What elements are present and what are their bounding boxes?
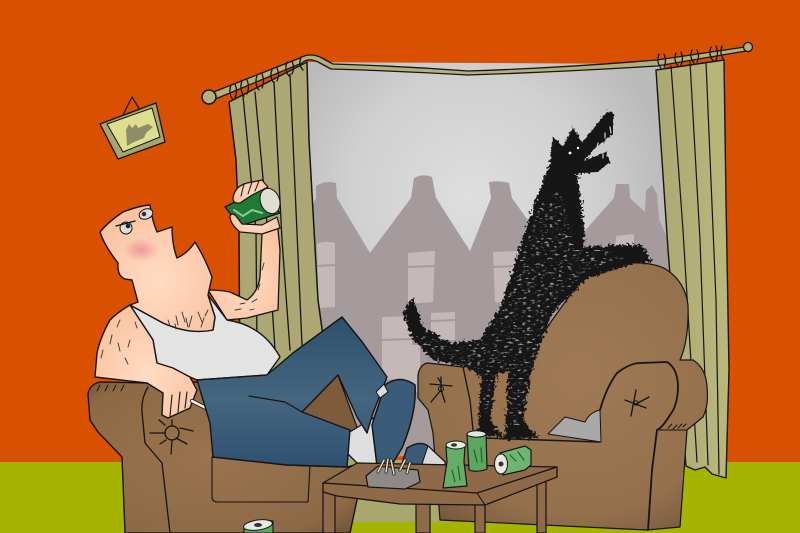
panel: man — [95, 180, 445, 475]
band below window — [340, 460, 450, 522]
beer can 1 — [443, 441, 467, 488]
arm hatching — [658, 424, 687, 430]
seat cushion line — [212, 457, 310, 502]
chest and body hair — [168, 263, 264, 329]
second leg sock — [347, 418, 380, 469]
grey cloth — [548, 410, 601, 442]
table legs — [323, 476, 546, 533]
left curtain — [229, 62, 332, 400]
star tear right — [625, 390, 649, 416]
star tear — [150, 420, 193, 454]
beer can on floor — [243, 518, 273, 533]
panel: right armchair — [418, 263, 708, 530]
dog teeth — [597, 127, 611, 158]
house windows — [317, 234, 634, 392]
hand on can — [233, 180, 268, 203]
eyes — [116, 207, 154, 234]
curtain folds — [243, 74, 302, 350]
jeans crease — [249, 396, 302, 412]
wolf shadow in picture — [126, 124, 153, 146]
ashtray — [366, 459, 420, 489]
jeans — [197, 317, 387, 467]
slipper flat — [400, 443, 445, 475]
slipper upright — [372, 380, 415, 471]
arm hair — [101, 320, 137, 364]
arm hatching — [97, 385, 124, 391]
rod finial left — [202, 90, 216, 104]
floor — [0, 462, 800, 533]
vest — [130, 295, 280, 380]
right arm front — [600, 362, 678, 530]
star tear left — [430, 377, 452, 402]
head and neck — [100, 205, 215, 331]
right curtain — [656, 60, 729, 478]
dog eyes — [569, 152, 571, 154]
cigarette — [192, 401, 208, 409]
sky — [298, 62, 690, 420]
cigarette butts — [378, 459, 410, 474]
panel: window view — [298, 62, 690, 470]
raised arm — [208, 220, 280, 320]
curtain rings — [230, 46, 724, 100]
houses silhouette — [311, 175, 690, 470]
beer can lying — [494, 446, 531, 475]
table — [323, 463, 557, 533]
beer can 2 — [467, 431, 487, 471]
dog body — [403, 112, 652, 439]
window dividers — [317, 246, 634, 340]
black dog — [403, 112, 652, 439]
seat line — [483, 438, 600, 442]
rod finial right — [744, 42, 752, 52]
chair under knee — [302, 375, 358, 432]
left arm front line — [463, 367, 473, 430]
arm holding cigarette — [95, 305, 197, 418]
dog head — [551, 112, 613, 185]
curtain folds — [671, 62, 719, 474]
fingers — [170, 392, 187, 416]
beer can in hand — [225, 186, 283, 226]
picture on wall — [100, 97, 165, 159]
curtain rod — [202, 42, 752, 104]
dog fur highlights — [415, 190, 625, 425]
arm front line — [142, 387, 170, 533]
panel: man's armchair — [88, 375, 365, 533]
table top — [323, 463, 557, 505]
blush — [123, 238, 159, 262]
